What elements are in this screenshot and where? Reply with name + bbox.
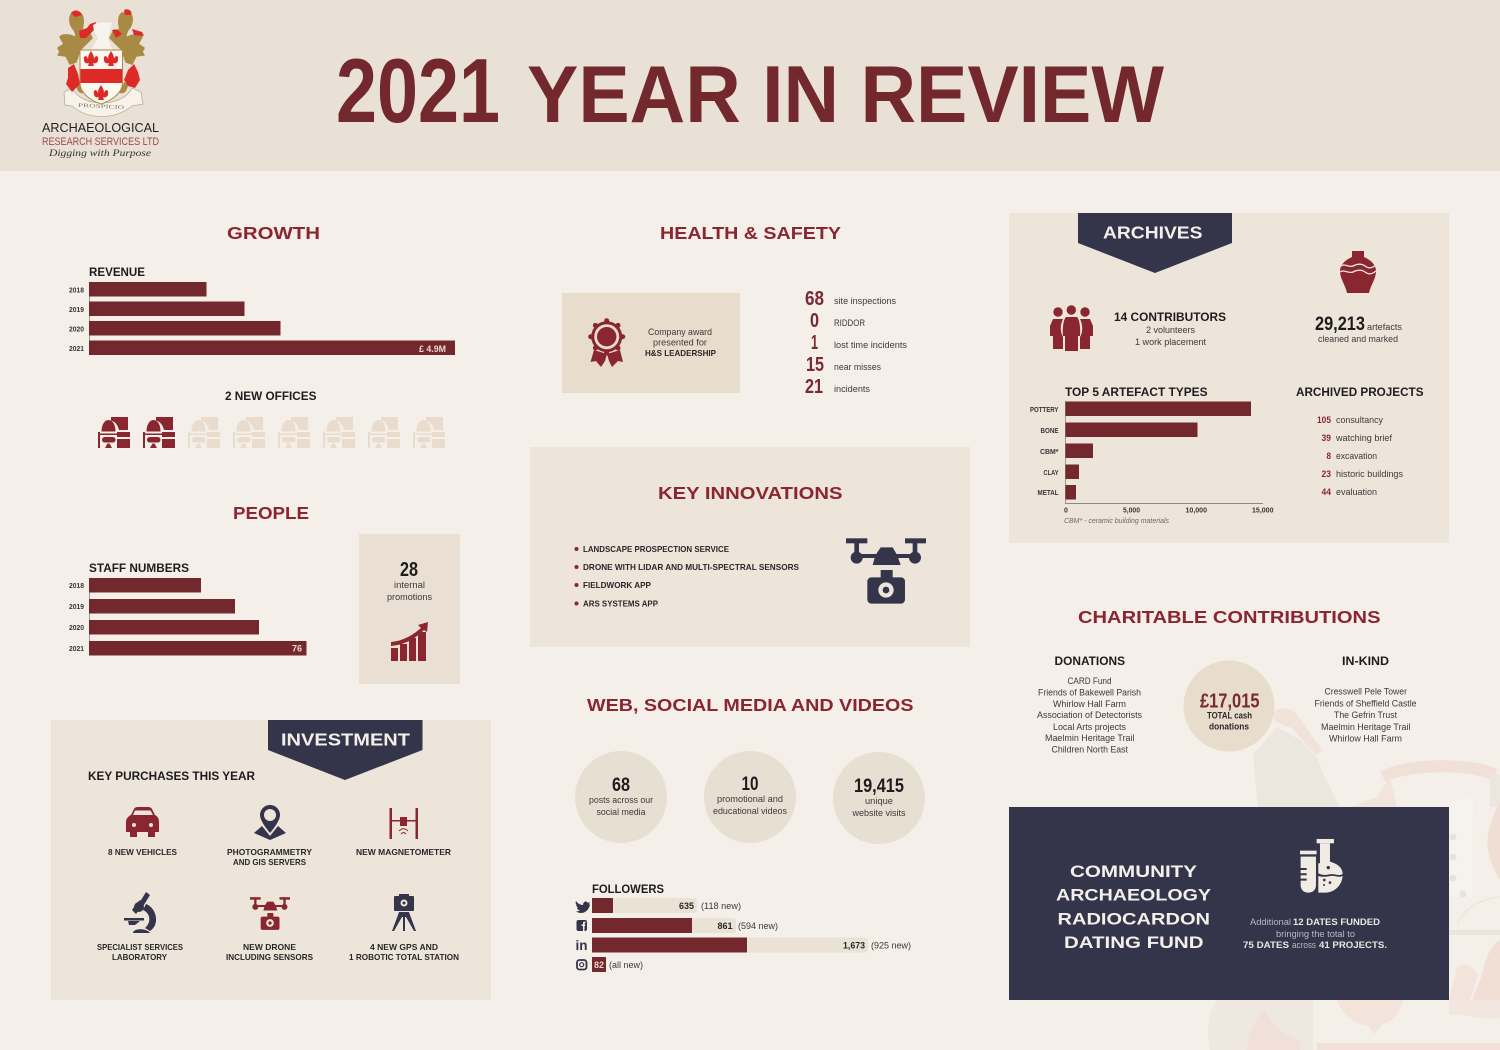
list: donations [1037,654,1142,754]
crest: gold mantling right [110,13,144,64]
heading: fund name [1056,862,1212,952]
chart: followers: (594 new) [738,921,778,931]
heading: growth: GROWTH [227,223,320,243]
tagline: Digging with Purpose [48,149,151,159]
chart: staff numbers: 2021 [69,646,84,653]
list: archived projects: 23 [1322,469,1331,480]
list: archived projects: 44 [1322,487,1332,498]
chart: followers: (all new) [609,960,643,970]
banner: archives: ARCHIVES [1103,222,1202,242]
stats list: 21 [805,376,823,398]
chart: revenue: 2020 [69,326,84,334]
bullet list [574,544,799,608]
list: archived projects: historic buildings [1336,469,1403,479]
panel: key innovations [530,447,970,647]
callout: award: presented for [653,338,707,348]
title: year: 2021 [336,41,500,142]
heading: fund name: ARCHAEOLOGY [1056,886,1212,904]
chart: top 5 artefact types: BONE [1040,428,1059,435]
chart: top 5 artefact types: 15,000 [1252,508,1274,514]
list: in-kind: The Gefrin Trust [1334,710,1397,720]
callout: internal promotions: internal [394,580,425,590]
panel: charitable contributions [1037,607,1416,754]
company name line 2: RESEARCH SERVICES LTD [42,136,159,148]
chart: followers: 635 [679,901,695,912]
chart: top 5 artefact types: 10,000 [1186,508,1207,514]
chart: followers: 82 [594,960,604,971]
chart: revenue [69,265,455,355]
item: gps and total station: 1 ROBOTIC TOTAL STATION [349,952,459,962]
item: laboratory [97,892,183,962]
icon: drone [846,538,926,604]
chart: top 5 artefact types: CBM* - ceramic building materials [1064,518,1169,525]
list: in-kind: Whirlow Hall Farm [1329,734,1402,744]
heading: charitable contributions: CHARITABLE CONTRIBUTIONS [1078,607,1380,627]
callout: award: Company award [648,327,712,337]
stats list: 0 [810,310,819,332]
stat: posts: posts across our [589,795,653,805]
list: donations: Maelmin Heritage Trail [1045,733,1134,743]
stat: posts: social media [596,807,646,817]
stats list: incidents [834,384,870,394]
title [336,41,1165,142]
list: donations: Association of Detectorists [1037,710,1142,720]
banner: investment: INVESTMENT [281,730,410,750]
heading: people: PEOPLE [233,503,309,523]
icon: people [1050,305,1093,351]
icons: offices row [98,417,445,448]
list: archived projects: excavation [1336,451,1377,461]
text: dates funded: across [1292,940,1316,950]
crest: shield [80,50,122,104]
list: donations: Local Arts projects [1053,722,1126,732]
chart: followers: (925 new) [871,940,911,950]
stat: videos: promotional and [717,794,783,804]
company name line 1: ARCHAEOLOGICAL [42,120,159,135]
chart: top 5 artefact types: METAL [1038,490,1059,497]
stat: website visits: website visits [852,808,906,818]
callout: internal promotions [359,534,460,684]
heading: fund name: COMMUNITY [1070,862,1198,881]
stat: videos [704,751,796,843]
stat: videos: educational videos [713,806,787,816]
stats list: RIDDOR [834,318,865,328]
logo: crest and company name [42,9,159,159]
list: archived projects: evaluation [1336,487,1377,497]
callout: award: H&S LEADERSHIP [645,348,716,358]
item: photogrammetry: PHOTOGRAMMETRY [227,847,312,857]
list: archived projects: 39 [1322,433,1331,444]
chart: staff numbers: 2020 [69,625,84,632]
text: artefacts: cleaned and marked [1318,334,1398,344]
heading: web social media and videos: WEB, SOCIAL MEDIA AND VIDEOS [587,695,914,715]
chart: top 5 artefact types: CBM* [1040,449,1059,456]
text: contributors: 2 volunteers [1146,325,1195,335]
chart: followers: 861 [718,921,733,932]
label: 2 new offices: 2 NEW OFFICES [225,389,316,403]
list: archived projects: watching brief [1335,433,1393,443]
stat: posts: 68 [612,775,630,796]
panel: health and safety [562,223,908,398]
callout: total cash donations: TOTAL cash [1207,710,1252,720]
text: dates funded: 75 DATES [1243,940,1289,950]
bullet list: DRONE WITH LIDAR AND MULTI-SPECTRAL SENSORS [583,562,799,572]
icon: linkedin: in [576,937,588,953]
stats list: 1 [811,332,818,354]
list: archived projects: ARCHIVED PROJECTS [1296,385,1424,399]
chart: top 5 artefact types: CLAY [1044,470,1059,477]
bullet list: ARS SYSTEMS APP [583,598,658,608]
panel: archives [1009,213,1449,543]
chart: top 5 artefact types: TOP 5 ARTEFACT TYPES [1065,385,1208,399]
callout: internal promotions: 28 [400,559,418,581]
chart: staff numbers: STAFF NUMBERS [89,561,189,575]
heading: fund name: RADIOCARDON [1058,910,1210,928]
stats list: near misses [834,362,881,372]
icon: vase [1340,251,1376,293]
chart: revenue: 2018 [69,288,84,294]
item: gps and total station: 4 NEW GPS AND [370,942,438,952]
crest: red accents [66,9,144,92]
panel: web, social media and videos [575,695,925,972]
watermark: faint crest [1208,708,1500,1050]
title: year in review: YEAR IN REVIEW [527,50,1165,140]
stats list [805,288,908,398]
chart: top 5 artefact types: 0 [1064,508,1068,514]
heading: health and safety: HEALTH & SAFETY [660,223,841,243]
banner: investment [268,720,422,780]
list: archived projects: 8 [1326,451,1331,462]
item: magnetometer [356,808,451,857]
stat: website visits [833,752,925,844]
chart: followers: (118 new) [701,901,741,911]
header band [0,0,1500,171]
icon: rosette [588,318,625,367]
icon: facebook [576,920,587,931]
chart: revenue: £ 4.9M [419,344,446,354]
list: donations: Whirlow Hall Farm [1053,699,1126,709]
callout: total cash donations: donations [1209,722,1249,732]
text: dates funded: 41 PROJECTS. [1319,940,1387,950]
item: magnetometer: NEW MAGNETOMETER [356,847,451,857]
callout: award [562,293,740,393]
panel: investment [51,720,491,1000]
stat: website visits: 19,415 [854,776,904,797]
panel: growth [69,223,455,448]
chart: staff numbers [69,561,306,656]
stat: website visits: unique [865,796,893,806]
chart: top 5 artefact types [1030,385,1274,525]
item: laboratory: LABORATORY [112,952,167,962]
chart: staff numbers: 2019 [69,604,84,611]
panel: community archaeology radiocarbon fund [1009,807,1449,1000]
chart: followers: 1,673 [843,940,865,952]
callout: total cash donations: £17,015 [1200,690,1260,712]
chart: revenue: REVENUE [89,265,145,279]
text: contributors: 1 work placement [1135,337,1206,347]
list: in-kind [1314,654,1416,744]
panel: people [69,503,460,684]
crest: motto: PROSPICIO [78,103,124,111]
label: key purchases: KEY PURCHASES THIS YEAR [88,769,255,783]
item: vehicles: 8 NEW VEHICLES [108,847,177,857]
stats list: site inspections [834,296,896,306]
text: artefacts [1315,314,1403,344]
crest: gold lower curls [76,82,128,93]
chart: followers: FOLLOWERS [592,882,664,896]
stats list: lost time incidents [834,340,908,350]
item: photogrammetry [227,805,312,867]
chart: revenue: 2019 [69,307,84,314]
crest: helmet [91,22,112,50]
banner: archives [1078,213,1232,273]
list: donations: CARD Fund [1068,676,1112,686]
heading: fund name: DATING FUND [1064,933,1204,952]
item: photogrammetry: AND GIS SERVERS [233,857,306,867]
item: drone [226,897,313,962]
list: donations: DONATIONS [1054,654,1125,668]
list: in-kind: Friends of Sheffield Castle [1314,698,1416,708]
bullet list: FIELDWORK APP [583,580,651,590]
list: in-kind: Maelmin Heritage Trail [1321,722,1410,732]
crest: fleurs [84,51,98,66]
stats list: 68 [805,288,824,310]
stat: posts [575,751,667,843]
icon: instagram [577,960,586,970]
chart: staff numbers: 2018 [69,583,84,590]
list: archived projects: consultancy [1336,415,1383,425]
item: drone: NEW DRONE [243,942,296,952]
stats list: 15 [806,354,824,376]
text: dates funded: bringing the total to [1276,929,1355,939]
bullet list: LANDSCAPE PROSPECTION SERVICE [583,544,729,554]
list: donations: Friends of Bakewell Parish [1038,688,1141,698]
text: contributors [1114,310,1226,347]
callout: internal promotions: promotions [387,592,432,602]
chart: top 5 artefact types: POTTERY [1030,407,1059,414]
chart: revenue: 2021 [69,346,84,353]
stat: videos: 10 [742,774,758,795]
text: artefacts: 29,213 [1315,314,1365,335]
chart: followers [576,882,911,972]
item: laboratory: SPECIALIST SERVICES [97,942,183,952]
list: archived projects [1296,385,1424,498]
chart: staff numbers: 76 [292,644,302,654]
list: archived projects: 105 [1317,415,1332,426]
icon: flask and test tube [1300,839,1343,893]
icon: twitter [576,901,590,913]
item: drone: INCLUDING SENSORS [226,952,313,962]
heading: key innovations: KEY INNOVATIONS [658,483,842,503]
icon: growth chart [391,622,428,661]
crest: scroll [64,88,143,116]
text: dates funded: 12 DATES FUNDED [1293,917,1381,927]
text: dates funded: Additional [1250,917,1291,927]
chart: top 5 artefact types: 5,000 [1123,508,1140,514]
text: artefacts: artefacts [1367,322,1403,332]
list: donations: Children North East [1052,744,1128,754]
item: gps and total station [349,894,459,962]
item: vehicles [108,807,177,857]
callout: total cash donations [1184,660,1274,752]
text: contributors: 14 CONTRIBUTORS [1114,310,1226,324]
list: in-kind: IN-KIND [1342,654,1389,668]
text: dates funded [1243,917,1387,950]
crest: gold mantling left [58,13,92,64]
list: in-kind: Cresswell Pele Tower [1324,686,1407,696]
